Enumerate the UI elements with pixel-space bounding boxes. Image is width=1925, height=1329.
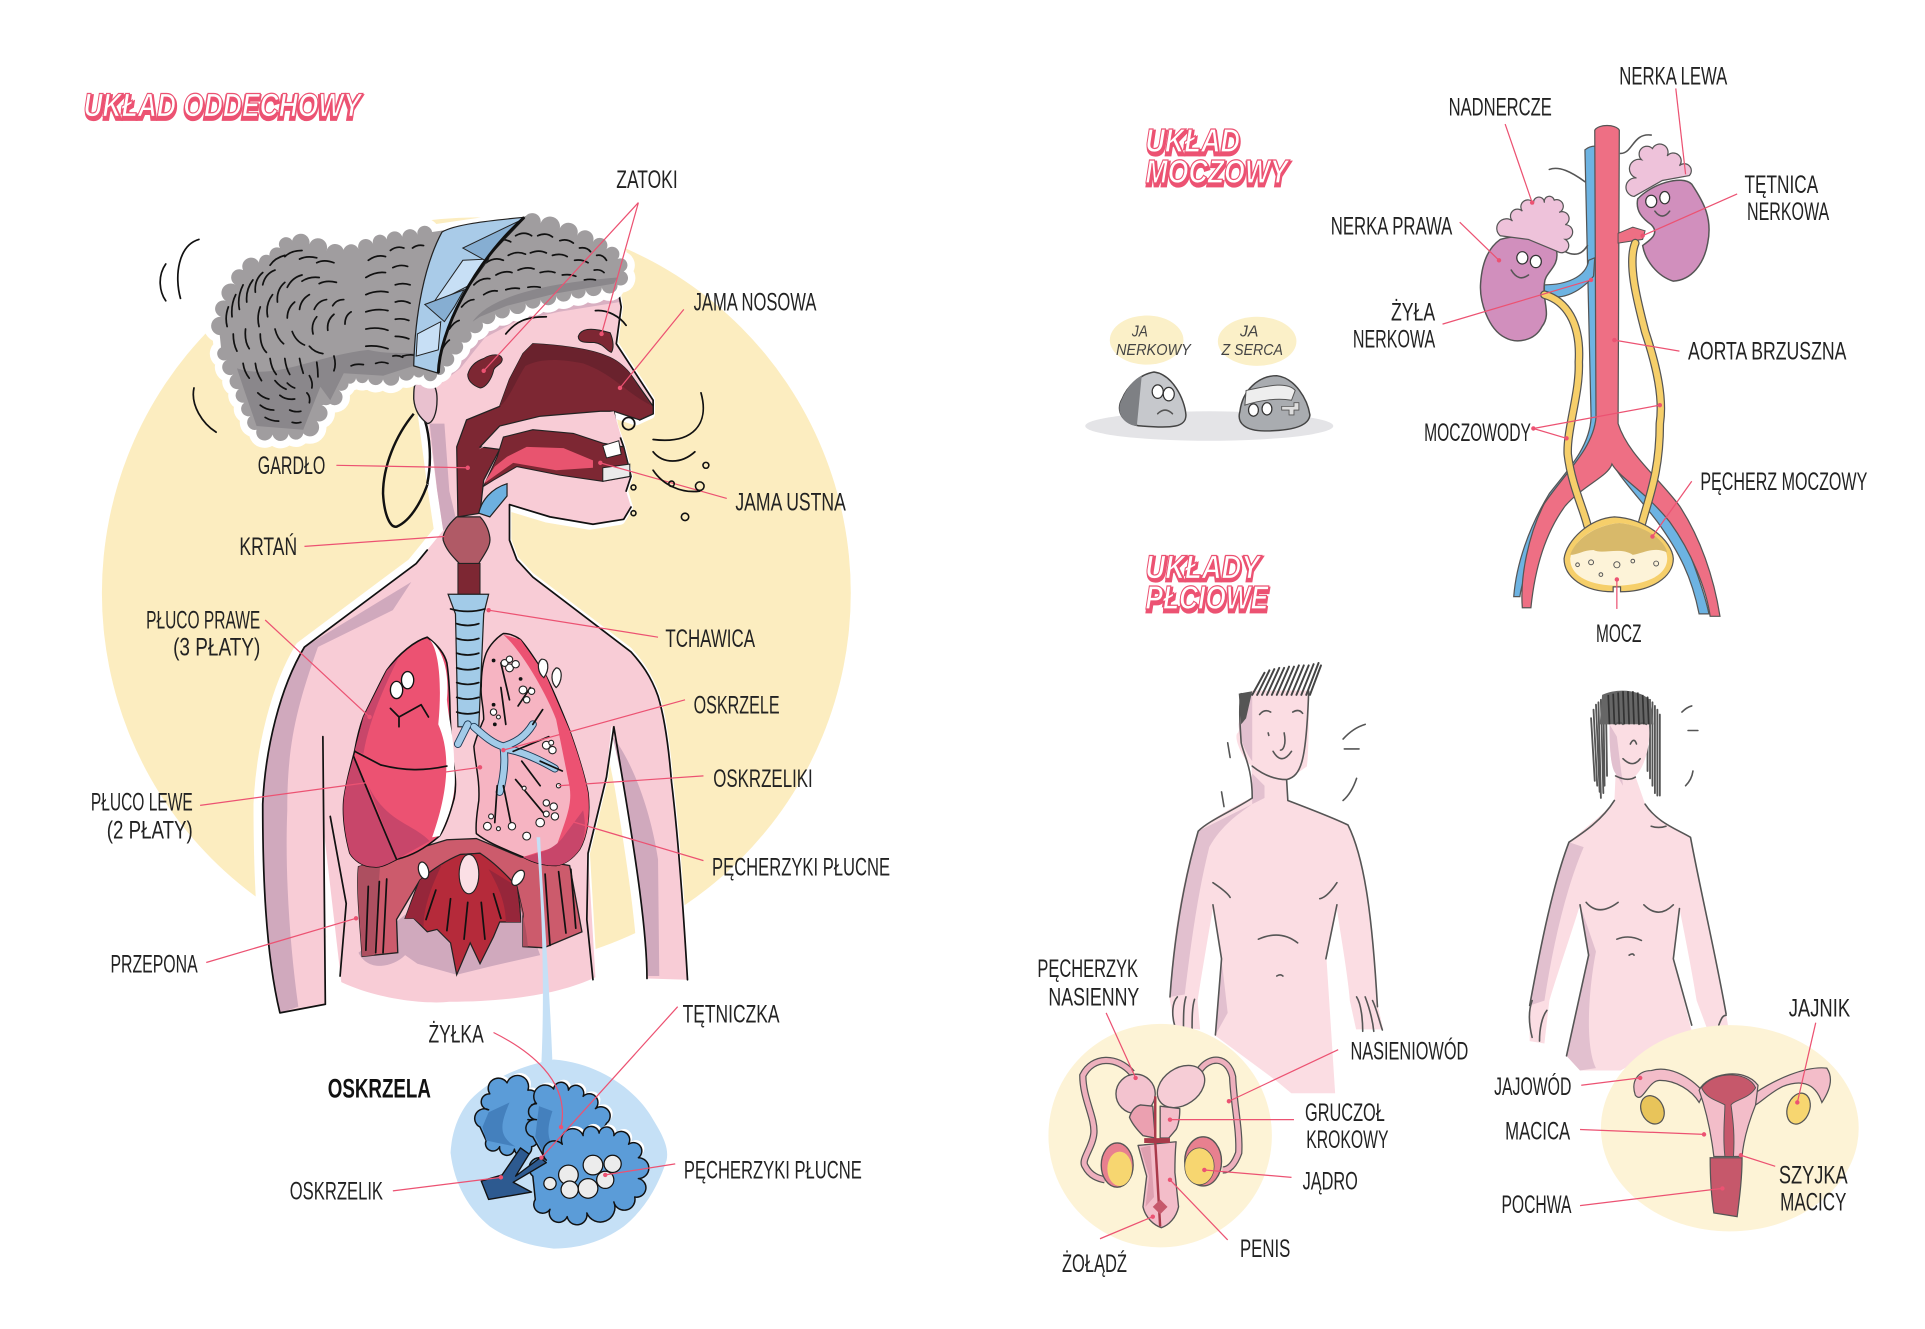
arm shading: right	[613, 737, 659, 976]
label: PENIS	[1168, 1178, 1290, 1263]
label: JAMA NOSOWA	[618, 290, 817, 390]
speech bubble: kidney stone	[1110, 316, 1183, 365]
speech text: heart stone	[1221, 323, 1283, 359]
hairline shading on face	[444, 287, 620, 381]
label: MOCZ: MOCZ	[1596, 621, 1641, 648]
female shading	[1530, 724, 1623, 1071]
larynx	[443, 517, 490, 598]
label: OSKRZELIKI: OSKRZELIKI	[713, 766, 813, 793]
motion marks male	[1222, 724, 1365, 807]
label: PŁUCO PRAWE: (3 PŁATY)	[173, 635, 260, 662]
lobe A	[475, 1075, 538, 1157]
connector from lung to detail circle	[536, 837, 552, 1063]
alveoli on top of lung	[538, 659, 561, 688]
motion marks around head	[160, 239, 703, 492]
glans chamber	[1153, 1199, 1168, 1214]
ear	[414, 379, 437, 424]
teeth upper	[603, 441, 621, 458]
air sacs	[544, 1155, 621, 1198]
male face	[1260, 710, 1303, 759]
label: POCHWA	[1501, 1186, 1725, 1219]
label: SZYJKA MACICY: MACICY	[1780, 1190, 1846, 1217]
label: NASIENIOWÓD: NASIENIOWÓD	[1350, 1039, 1468, 1066]
label: PĘCHERZ MOCZOWY	[1650, 469, 1867, 539]
label: MOCZOWODY: MOCZOWODY	[1424, 420, 1531, 447]
speech text: kidney stone: JA	[1131, 323, 1148, 340]
male figure	[1170, 663, 1382, 1093]
trachea tube	[448, 594, 489, 727]
diaphragm	[358, 839, 582, 975]
label: OSKRZELE: OSKRZELE	[694, 692, 780, 719]
label: TĘTNICA NERKOWA: TĘTNICA	[1745, 172, 1819, 199]
bladder inside	[1570, 523, 1667, 586]
renal vein	[1544, 258, 1595, 297]
hair mass	[211, 213, 628, 441]
stem	[481, 1148, 546, 1199]
prostate left	[1129, 1105, 1155, 1138]
label: ZATOKI	[481, 167, 678, 373]
tongue	[484, 447, 593, 484]
female torso lines	[1586, 826, 1673, 955]
label: PĘCHERZYKI PŁUCNE (lungs): PĘCHERZYKI PŁUCNE	[712, 854, 890, 881]
hair shadow	[237, 277, 618, 430]
smile	[1655, 211, 1670, 216]
female face	[1616, 723, 1646, 779]
stone: heart	[1239, 376, 1310, 431]
eye one	[401, 672, 414, 689]
detail: bronchi circle	[451, 1060, 667, 1249]
cartoon: kidney stone and heart stone	[1085, 316, 1333, 441]
label: POCHWA: POCHWA	[1501, 1192, 1572, 1219]
label: MOCZOWODY	[1424, 403, 1662, 447]
eyes	[1646, 192, 1670, 207]
label: TĘTNICZKA: TĘTNICZKA	[683, 1002, 780, 1029]
lobe C highlight	[564, 1124, 644, 1176]
teeth lower	[603, 464, 630, 481]
label: MACICA	[1505, 1118, 1706, 1145]
label: PĘCHERZYK NASIENNY: NASIENNY	[1048, 984, 1139, 1011]
male hands	[1173, 997, 1382, 1031]
label: ŻYŁA NERKOWA: ŻYŁA	[1391, 299, 1436, 326]
bladder	[1564, 517, 1673, 592]
bandage	[1245, 385, 1295, 405]
sinus: frontal	[578, 329, 613, 352]
palate	[479, 411, 621, 449]
label: PĘCHERZYKI PŁUCNE (detail)	[603, 1158, 862, 1185]
vena cava (blue)	[1514, 146, 1709, 614]
female body	[1530, 724, 1731, 1071]
smile	[1511, 270, 1528, 278]
hair	[211, 213, 628, 441]
prostate right	[1160, 1106, 1180, 1138]
dome dark edge	[405, 864, 521, 927]
vas deferens right	[1199, 1060, 1239, 1170]
stone eyes angry	[1249, 403, 1272, 416]
lobe B	[526, 1082, 610, 1156]
label: ŻOŁĄDŹ	[1062, 1214, 1155, 1278]
label: PRZEPONA	[110, 916, 358, 978]
body outline	[263, 280, 688, 1013]
lung body	[343, 637, 456, 867]
label: JAJNIK	[1789, 996, 1851, 1105]
motion marks female	[1682, 706, 1698, 786]
label: ŻOŁĄDŹ: ŻOŁĄDŹ	[1062, 1251, 1127, 1278]
yellow circle	[1601, 1025, 1859, 1231]
title: respiratory system: UKŁAD ODDECHOWY	[83, 88, 363, 125]
nose ring	[622, 417, 635, 430]
fallopian tube left	[1634, 1069, 1704, 1102]
stone: kidney	[1119, 372, 1186, 427]
title: reproductive systems: PŁCIOWE	[1145, 580, 1269, 617]
vas deferens left	[1083, 1060, 1132, 1180]
headband darker panels	[425, 219, 524, 322]
label: ŻYŁKA: ŻYŁKA	[428, 1021, 484, 1048]
label: MACICA: MACICA	[1505, 1118, 1571, 1145]
shaft shading	[1141, 1145, 1154, 1207]
panel: urinary system	[1085, 64, 1867, 648]
label: JĄDRO	[1202, 1168, 1358, 1196]
label: PŁUCO LEWE: PŁUCO LEWE	[91, 789, 193, 816]
ureter: right	[1544, 295, 1587, 525]
yellow circle	[1048, 1024, 1272, 1247]
ureter fill: right	[1544, 295, 1587, 525]
ovary right	[1783, 1090, 1814, 1127]
label: PŁUCO LEWE: (2 PŁATY)	[107, 818, 193, 845]
label: SZYJKA MACICY: SZYJKA	[1779, 1163, 1848, 1190]
label: NADNERCZE: NADNERCZE	[1449, 94, 1552, 121]
label: TCHAWICA	[486, 608, 755, 653]
male torso lines	[1213, 883, 1337, 976]
detail circle: male	[1048, 1024, 1272, 1247]
label: PĘCHERZYK NASIENNY: PĘCHERZYK	[1037, 956, 1138, 983]
title: urinary system: MOCZOWY	[1147, 156, 1290, 193]
female hair	[1591, 695, 1660, 798]
testis left	[1101, 1143, 1133, 1187]
female fringe lines	[1608, 691, 1649, 724]
white halo around body	[259, 264, 684, 1013]
label: NERKA PRAWA	[1331, 214, 1501, 262]
sinus: sphenoid	[468, 355, 502, 388]
label: OSKRZELIK: OSKRZELIK	[290, 1178, 383, 1205]
opening	[459, 854, 479, 894]
title: urinary system: UKŁAD	[1145, 123, 1240, 160]
lobe C	[529, 1126, 649, 1225]
label: PŁUCO PRAWE	[146, 608, 372, 719]
label: OSKRZELIK	[290, 1175, 503, 1205]
tube below larynx	[458, 564, 480, 598]
male outline	[1170, 691, 1377, 1035]
detail circle: female	[1601, 1025, 1859, 1231]
label: PŁUCO PRAWE: PŁUCO PRAWE	[146, 608, 260, 635]
fissures	[354, 751, 447, 859]
exhaled bubbles	[631, 462, 709, 521]
kidney: right	[1480, 196, 1573, 341]
speech text: kidney stone	[1116, 323, 1192, 359]
lung edge	[474, 634, 589, 866]
trachea rings	[451, 609, 485, 714]
label: NASIENIOWÓD	[1227, 1039, 1468, 1103]
label: JAMA NOSOWA: JAMA NOSOWA	[694, 290, 817, 317]
label: ŻYŁA NERKOWA: NERKOWA	[1353, 326, 1436, 353]
label: MOCZ	[1596, 577, 1641, 648]
black dots	[494, 661, 521, 724]
kidney body	[1480, 236, 1557, 341]
lower lobe shading	[343, 756, 430, 867]
central dome	[405, 853, 521, 975]
label: GRUCZOŁ KROKOWY: GRUCZOŁ	[1305, 1100, 1385, 1127]
urethra	[1155, 1096, 1160, 1226]
lung: right	[343, 637, 456, 867]
title: reproductive systems: UKŁADY	[1145, 549, 1262, 586]
arm shading: left	[263, 582, 411, 1013]
aorta (red)	[1522, 126, 1720, 616]
earring	[383, 414, 430, 527]
penis column	[1138, 1142, 1179, 1228]
label: GRUCZOŁ KROKOWY	[1168, 1100, 1389, 1154]
headband light panels	[416, 259, 489, 356]
nub left	[417, 861, 431, 880]
title: respiratory system: UKŁAD ODDECHOWY	[85, 90, 362, 127]
seminal vesicle right	[1149, 1057, 1213, 1116]
female outline	[1530, 800, 1726, 1056]
label: GARDŁO: GARDŁO	[258, 453, 325, 480]
larynx bulb	[443, 517, 490, 564]
label: PENIS: PENIS	[1240, 1236, 1290, 1263]
red rim	[503, 635, 589, 866]
headband black edge	[438, 217, 524, 373]
headband	[414, 217, 524, 373]
title: reproductive systems: PŁCIOWE	[1147, 582, 1269, 619]
stone mouth	[1158, 410, 1172, 414]
trachea	[448, 594, 489, 727]
label: PRZEPONA: PRZEPONA	[110, 951, 198, 978]
label: PĘCHERZYKI PŁUCNE (detail): PĘCHERZYKI PŁUCNE	[684, 1158, 862, 1185]
female figure	[1529, 691, 1731, 1071]
muscle fibres	[366, 869, 576, 953]
label: TĘTNICZKA	[539, 1002, 780, 1160]
base band	[1144, 1138, 1170, 1143]
ovary left	[1636, 1092, 1669, 1128]
label: KRTAŃ: KRTAŃ	[239, 534, 297, 561]
mouth cavity	[484, 430, 631, 486]
label: JAMA USTNA: JAMA USTNA	[735, 490, 846, 517]
label: NADNERCZE	[1449, 94, 1552, 205]
lung: left (open)	[458, 634, 589, 866]
title: reproductive systems: UKŁADY	[1147, 552, 1262, 589]
eyes	[1517, 252, 1541, 268]
bubbles	[1576, 559, 1659, 576]
panel: respiratory system	[83, 88, 890, 1249]
label: PĘCHERZYK NASIENNY	[1037, 956, 1139, 1080]
dome lines	[426, 890, 501, 939]
body: head, neck, torso and arms	[263, 264, 688, 1013]
nub right	[509, 868, 527, 888]
label: ZATOKI: ZATOKI	[616, 167, 678, 194]
label: JAJOWÓD: JAJOWÓD	[1494, 1074, 1571, 1101]
testis right	[1185, 1137, 1222, 1186]
title: urinary system	[1145, 123, 1290, 193]
renal artery	[1618, 227, 1645, 243]
eyebrow marks	[506, 310, 626, 334]
stone dark side	[1119, 376, 1142, 426]
diaphragm shadow	[358, 909, 540, 975]
lobe A highlight	[477, 1073, 540, 1144]
kidney: left	[1626, 144, 1709, 281]
stone eyes	[1152, 385, 1174, 401]
label: JAMA USTNA	[598, 461, 846, 517]
label: GRUCZOŁ KROKOWY: KROKOWY	[1306, 1127, 1389, 1154]
label: JAJNIK: JAJNIK	[1789, 996, 1851, 1023]
lobe inner dark	[482, 1102, 559, 1154]
vas deferens fill left	[1083, 1060, 1132, 1180]
label: TĘTNICA NERKOWA	[1640, 172, 1830, 238]
label: AORTA BRZUSZNA: AORTA BRZUSZNA	[1688, 339, 1847, 366]
panel: reproductive systems	[1037, 549, 1859, 1278]
label: GARDŁO	[258, 453, 470, 480]
label: ŻYŁKA	[428, 1021, 563, 1129]
ureter fill: left	[1632, 243, 1661, 525]
female fringe backing	[1600, 691, 1654, 724]
title: reproductive systems	[1145, 549, 1269, 619]
male shading	[1170, 691, 1265, 1035]
speech text: heart stone: JA	[1239, 323, 1258, 340]
blue circle	[451, 1060, 667, 1249]
vas deferens fill right	[1199, 1060, 1239, 1170]
label: KRTAŃ	[239, 534, 444, 561]
lung mouth	[390, 705, 428, 727]
side muscle dark	[358, 859, 528, 956]
label: ŻYŁA NERKOWA	[1353, 278, 1593, 353]
speech bubble: heart stone	[1218, 317, 1296, 366]
epiglottis	[479, 484, 507, 517]
neck shading	[430, 424, 457, 530]
male body	[1170, 691, 1382, 1093]
label: JĄDRO: JĄDRO	[1303, 1169, 1358, 1196]
label: OSKRZELE	[501, 692, 780, 752]
label: NERKA LEWA	[1619, 64, 1728, 174]
adrenal	[1626, 144, 1691, 196]
label: SZYJKA MACICY	[1739, 1153, 1848, 1217]
kidney body	[1637, 180, 1709, 281]
speech text: heart stone: Z SERCA	[1221, 342, 1283, 359]
label: NERKA LEWA: NERKA LEWA	[1619, 64, 1728, 91]
male hair	[1252, 663, 1321, 695]
label: PĘCHERZYKI PŁUCNE (lungs)	[567, 820, 890, 881]
white highlight	[430, 640, 455, 837]
speech text: kidney stone: NERKOWY	[1116, 342, 1192, 359]
heading: OSKRZELA: OSKRZELA	[328, 1074, 431, 1104]
headband base	[414, 217, 524, 373]
female hands	[1529, 1001, 1726, 1041]
nerve lines	[1549, 135, 1651, 254]
background circle	[102, 217, 851, 969]
label: TĘTNICA NERKOWA: NERKOWA	[1747, 199, 1830, 226]
ureter: left	[1632, 243, 1661, 525]
lobe B highlight	[536, 1080, 613, 1144]
title: urinary system: UKŁAD	[1147, 126, 1240, 163]
hair halo	[211, 213, 628, 441]
urine upper	[1570, 523, 1667, 555]
label: TCHAWICA: TCHAWICA	[665, 626, 755, 653]
hair curls	[226, 233, 606, 423]
title: urinary system: MOCZOWY	[1145, 154, 1290, 191]
left edge shading	[355, 657, 399, 754]
bronchi fill	[458, 724, 555, 792]
nasal cavity shading	[500, 344, 651, 406]
vagina	[1710, 1158, 1742, 1217]
seminal vesicle left	[1116, 1074, 1155, 1114]
side muscle	[358, 839, 582, 956]
eye two	[390, 681, 403, 699]
label: PŁUCO LEWE	[91, 765, 482, 845]
bronchi outline	[458, 724, 555, 792]
label: OSKRZELIKI	[559, 766, 813, 793]
uterus	[1699, 1074, 1758, 1156]
rim dark	[523, 810, 585, 866]
male sideburn	[1239, 691, 1252, 724]
adrenal	[1497, 196, 1573, 253]
bronchi branches	[495, 663, 562, 823]
alveoli clusters	[483, 656, 561, 840]
fallopian tube right	[1756, 1068, 1830, 1105]
label: AORTA BRZUSZNA	[1612, 338, 1847, 366]
ground shadow	[1085, 411, 1333, 441]
bladder wall	[1564, 517, 1673, 592]
nasal cavity and pharynx	[457, 344, 653, 517]
plaster	[1282, 403, 1299, 415]
label: NERKA PRAWA: NERKA PRAWA	[1331, 214, 1453, 241]
uterine cavity	[1702, 1075, 1756, 1156]
